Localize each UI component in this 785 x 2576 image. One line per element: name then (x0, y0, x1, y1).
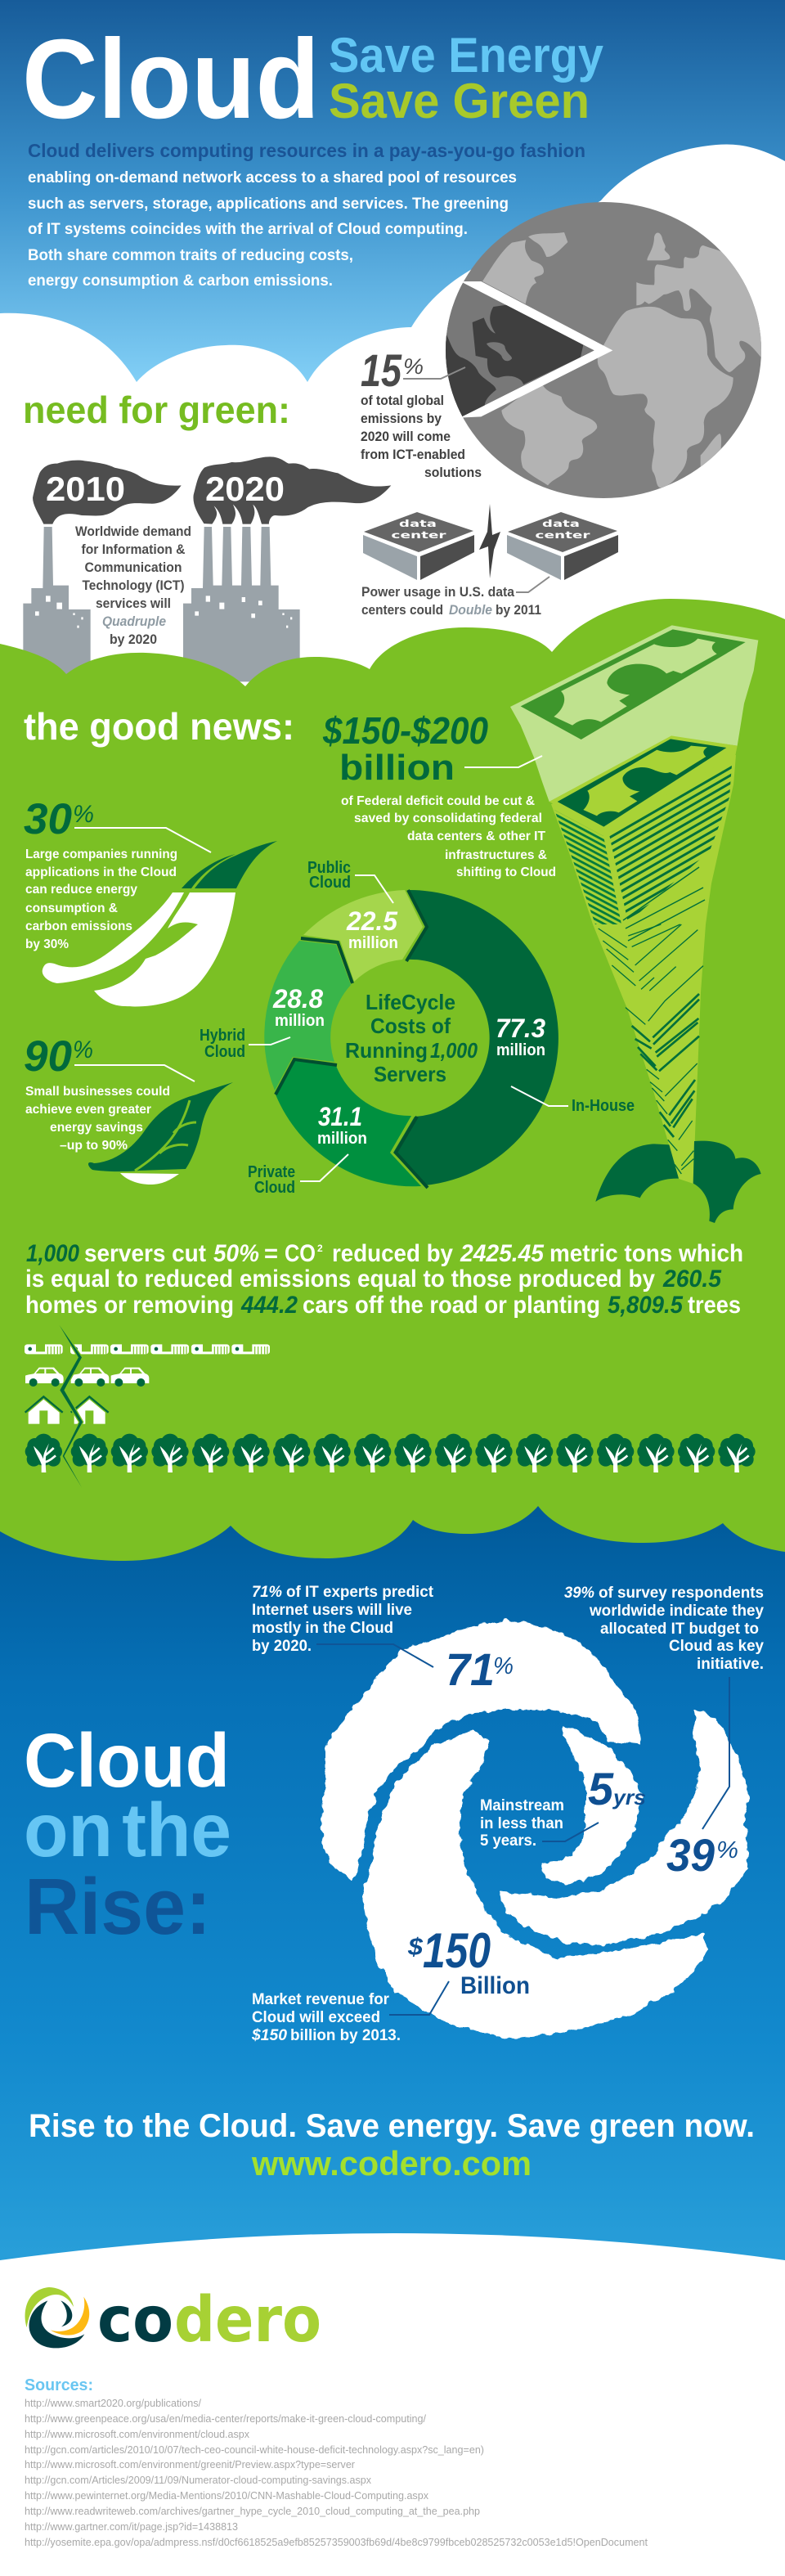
title: Cloud (22, 16, 320, 142)
callout: $150 billion: 150 (423, 1923, 491, 1978)
title (22, 16, 604, 142)
icon: money stack (510, 625, 758, 1184)
icon: dark leaf (88, 1082, 233, 1185)
15% statistic: 15 (361, 344, 402, 396)
callout: $150 billion: Market revenue for (252, 1991, 390, 2008)
callout: 39%: allocated IT budget to (600, 1621, 759, 1638)
text: server savings statement: 444.2 (240, 1292, 298, 1319)
segment: public cloud (303, 890, 423, 982)
callout: 90% small businesses: Small businesses could (25, 1085, 170, 1099)
callout: 5 years (480, 1763, 646, 1850)
intro paragraph: such as servers, storage, applications and services. The greening (28, 195, 509, 213)
intro paragraph: energy consumption & carbon emissions. (28, 272, 333, 290)
text: server savings statement: = (264, 1240, 278, 1267)
icon row: trains (25, 1344, 270, 1354)
callout: $150 billion: $150 (251, 2027, 287, 2044)
callout: $150 billion: billion by 2013. (290, 2027, 401, 2044)
15% statistic (361, 344, 482, 480)
callout: 71%: mostly in the Cloud (252, 1620, 393, 1637)
15% statistic: 2020 will come (361, 429, 451, 444)
donut chart: lifecycle costs: 31.1 (318, 1102, 362, 1131)
text: server savings statement: 1,000 (26, 1240, 79, 1267)
callout: $150-$200 billion (322, 709, 556, 879)
text: server savings statement: 2 (317, 1243, 323, 1254)
sources list: http://www.microsoft.com/environment/cloud.aspx (25, 2428, 249, 2440)
text: server savings statement: servers cut (84, 1240, 206, 1267)
text: server savings statement: 2425.45 (460, 1240, 545, 1267)
callout: 39%: Cloud as key (669, 1638, 764, 1655)
intro paragraph: of IT systems coincides with the arrival of Cloud computing. (28, 220, 468, 238)
sources list: http://www.greenpeace.org/usa/en/media-center/reports/make-it-green-cloud-computing/ (25, 2412, 426, 2425)
logo: codero: co (97, 2284, 173, 2357)
15% statistic: % (403, 354, 424, 379)
callout: $150-$200 billion: infrastructures & (445, 848, 547, 862)
intro paragraph: Cloud delivers computing resources in a pay-as-you-go fashion (28, 140, 585, 161)
power usage text: by 2011 (496, 602, 541, 618)
intro paragraph (28, 140, 585, 290)
callout: 90% small businesses: –up to 90% (60, 1139, 128, 1153)
callout: 39%: % (716, 1837, 738, 1863)
icon: data center cubes with lightning: center (535, 529, 590, 541)
label: hybrid cloud: Hybrid (200, 1027, 245, 1045)
text: server savings statement: CO (285, 1240, 316, 1267)
power usage text: Double (449, 602, 492, 618)
icon: data center cubes with lightning: data (542, 518, 580, 529)
heading: the good news: the good news: (24, 705, 294, 748)
callout: $150 billion: $ (407, 1934, 423, 1961)
callout: 90% small businesses: achieve even greater (25, 1103, 151, 1117)
callout: 71% (252, 1584, 514, 1695)
label: public cloud: Cloud (309, 874, 351, 892)
callout: 71%: 71 (446, 1643, 495, 1695)
15% statistic: emissions by (361, 411, 442, 426)
factory 2010 (23, 461, 182, 677)
callout: 30% large companies: consumption & (25, 901, 118, 915)
factory 2020: 2020 (205, 470, 285, 508)
label: private cloud: Private (248, 1163, 295, 1181)
sky background with cloud edge (0, 0, 785, 382)
callout: 39%: 39% (564, 1585, 594, 1602)
icon row: trees (25, 1434, 756, 1472)
ICT demand text (75, 524, 191, 647)
callout: 30% large companies: % (73, 801, 94, 828)
factory 2020 (183, 456, 391, 681)
sources list: http://yosemite.epa.gov/opa/admpress.nsf/d0cf6618525a9efb85257359003fb69d/4be8c9799fbceb028525732c0053e1d5!OpenDocument (25, 2536, 648, 2548)
logo: codero (25, 2284, 321, 2357)
text: server savings statement: is equal to reduced emissions equal to those produced by (25, 1266, 655, 1292)
donut chart: lifecycle costs: million (348, 934, 398, 952)
callout: 39% (564, 1585, 764, 1881)
callout: 30% large companies: Large companies running (25, 847, 177, 861)
text: server savings statement: 260.5 (662, 1266, 722, 1292)
icon: plant base of stack (595, 1141, 761, 1223)
stack hatching upper (554, 810, 621, 924)
segment: hybrid cloud (264, 941, 351, 1090)
donut chart: lifecycle costs: Running (345, 1038, 428, 1063)
callout: 90% small businesses: % (73, 1036, 93, 1063)
callout: $150-$200 billion: of Federal deficit could be cut & (341, 794, 535, 808)
icon row: cars (25, 1368, 149, 1387)
callout: $150-$200 billion: $150-$200 (322, 709, 488, 752)
callout: 71%: by 2020. (252, 1638, 312, 1655)
sources list: Sources: (25, 2376, 93, 2394)
segment: private cloud (276, 1061, 421, 1186)
callout: 5 years: in less than (480, 1815, 563, 1832)
ICT demand text: for Information & (82, 542, 185, 557)
sources list: http://www.microsoft.com/environment/greenit/Preview.aspx?type=server (25, 2458, 356, 2470)
panel: white footer (0, 2233, 785, 2576)
segment: in-house (393, 890, 558, 1185)
callout: 71%: % (493, 1653, 514, 1679)
icon: data center cubes with lightning: data (399, 518, 437, 529)
heading: cloud on the rise: Cloud (24, 1718, 230, 1803)
donut chart: lifecycle costs: million (496, 1041, 545, 1059)
icon: break crack (60, 1325, 83, 1487)
label: in-house: In-House (572, 1097, 635, 1115)
text: server savings statement (25, 1240, 743, 1319)
callout: 30% large companies (24, 795, 211, 951)
callout: $150-$200 billion: data centers & other IT (407, 829, 545, 843)
callout: $150 billion (251, 1923, 530, 2044)
icon: globe with 15% wedge (442, 202, 763, 498)
donut chart: lifecycle costs (200, 859, 635, 1197)
title: Save Green (329, 74, 590, 128)
text: server savings statement: 50% (213, 1240, 259, 1267)
sources list: http://www.pewinternet.org/Media-Mentions/2010/CNN-Mashable-Cloud-Computing.aspx (25, 2489, 428, 2502)
callout: 30% large companies: applications in the Cloud (25, 865, 177, 879)
callout: 39%: 39 (666, 1829, 715, 1881)
callout: 90% small businesses: 90 (24, 1032, 72, 1081)
icon: white swirl (321, 1621, 748, 2039)
icons: equivalents pictogram rows (25, 1325, 756, 1487)
call to action: Rise to the Cloud. Save energy. Save green now. (29, 2108, 755, 2144)
stack body (551, 755, 736, 1184)
text: server savings statement: cars off the road or planting (303, 1292, 600, 1319)
intro paragraph: enabling on-demand network access to a shared pool of resources (28, 169, 517, 187)
15% statistic: from ICT-enabled (361, 447, 465, 462)
call to action (29, 2108, 755, 2183)
callout: 5 years: Mainstream (480, 1797, 564, 1814)
callout: 71%: 71% (252, 1584, 282, 1601)
callout: 39%: worldwide indicate they (589, 1603, 764, 1620)
callout: 90% small businesses: energy savings (50, 1121, 143, 1135)
ICT demand text: services will (96, 596, 171, 611)
intro paragraph: Both share common traits of reducing costs, (28, 246, 353, 264)
title: Save Energy (329, 28, 604, 83)
callout: 5 years: 5 years. (480, 1832, 536, 1850)
sources list: http://www.smart2020.org/publications/ (25, 2397, 201, 2409)
label: hybrid cloud: Cloud (204, 1043, 245, 1061)
text: server savings statement: trees (688, 1292, 741, 1319)
sources list: http://gcn.com/Articles/2009/11/09/Numerator-cloud-computing-savings.aspx (25, 2474, 371, 2486)
text: server savings statement: metric tons which (550, 1240, 743, 1267)
15% statistic: solutions (424, 465, 482, 480)
callout: 5 years: yrs (612, 1785, 646, 1809)
donut chart: lifecycle costs: LifeCycle (366, 990, 455, 1014)
label: private cloud (248, 1154, 348, 1197)
callout: $150-$200 billion: shifting to Cloud (456, 865, 556, 879)
15% statistic: of total global (361, 393, 444, 408)
text: server savings statement: homes or removing (25, 1292, 234, 1319)
ICT demand text: Quadruple (102, 614, 166, 629)
ICT demand text: by 2020 (110, 632, 157, 647)
icon row: houses (25, 1396, 109, 1424)
donut chart: lifecycle costs: 28.8 (272, 984, 323, 1014)
icon: white leaf (43, 841, 277, 1006)
label: private cloud: Cloud (254, 1179, 295, 1197)
power usage text: Power usage in U.S. data (361, 584, 514, 600)
donut chart: lifecycle costs: 77.3 (496, 1014, 545, 1043)
heading: cloud on the rise (24, 1718, 231, 1951)
donut chart: lifecycle costs: Costs of (370, 1014, 451, 1038)
callout: $150-$200 billion: billion (339, 748, 455, 788)
heading: cloud on the rise: on the (24, 1787, 231, 1872)
callout: 39%: initiative. (697, 1656, 764, 1673)
icon: data center cubes with lightning (363, 504, 618, 580)
logo: codero: dero (174, 2284, 321, 2357)
factory 2010: 2010 (46, 470, 125, 508)
sources list: http://www.gartner.com/it/page.jsp?id=1438813 (25, 2520, 238, 2533)
donut chart: lifecycle costs: Servers (374, 1062, 446, 1086)
power usage text (361, 577, 550, 618)
callout: 30% large companies: can reduce energy (25, 883, 137, 897)
callout: $150 billion: Cloud will exceed (252, 2009, 380, 2026)
callout: 71%: Internet users will live (252, 1602, 412, 1619)
label: public cloud (307, 859, 393, 903)
callout: 5 years: 5 (588, 1763, 614, 1814)
stack hatching lower (599, 924, 703, 1174)
callout: $150-$200 billion: saved by consolidating federal (354, 811, 542, 825)
sources list: http://www.readwriteweb.com/archives/gartner_hype_cycle_2010_cloud_computing_at_the_pea.php (25, 2505, 480, 2517)
label: hybrid cloud (200, 1027, 290, 1061)
callout: 30% large companies: carbon emissions (25, 919, 132, 933)
heading: need for green: need for green: (23, 389, 290, 431)
heading: cloud on the rise: Rise: (25, 1862, 211, 1951)
donut chart: lifecycle costs: million (317, 1130, 367, 1148)
ICT demand text: Technology (ICT) (82, 578, 185, 593)
sources list: http://gcn.com/articles/2010/10/07/tech-ceo-council-white-house-deficit-technology.aspx?sc_lang=en) (25, 2443, 484, 2456)
callout: 90% small businesses (24, 1032, 195, 1153)
text: server savings statement: reduced by (332, 1240, 453, 1267)
callout: 71%: of IT experts predict (286, 1584, 434, 1601)
icon: data center cubes with lightning: center (391, 529, 446, 541)
label: public cloud: Public (307, 859, 351, 877)
label: in-house (511, 1086, 635, 1115)
callout: 39%: of survey respondents (599, 1585, 764, 1602)
call to action: www.codero.com (251, 2144, 532, 2183)
panel: blue rising background (0, 1489, 785, 2274)
callout: 30% large companies: 30 (24, 795, 72, 843)
callout: 30% large companies: by 30% (25, 937, 69, 951)
donut chart: lifecycle costs: 1,000 (430, 1038, 478, 1063)
power usage text: centers could (361, 602, 443, 618)
callout: $150 billion: Billion (460, 1972, 530, 1999)
donut chart: lifecycle costs: 22.5 (346, 906, 398, 936)
text: server savings statement: 5,809.5 (608, 1292, 684, 1319)
donut chart: lifecycle costs: million (275, 1012, 325, 1030)
sources list (25, 2376, 648, 2548)
panel: green good news background (0, 599, 785, 1561)
ICT demand text: Communication (85, 560, 182, 575)
ICT demand text: Worldwide demand (75, 524, 191, 539)
